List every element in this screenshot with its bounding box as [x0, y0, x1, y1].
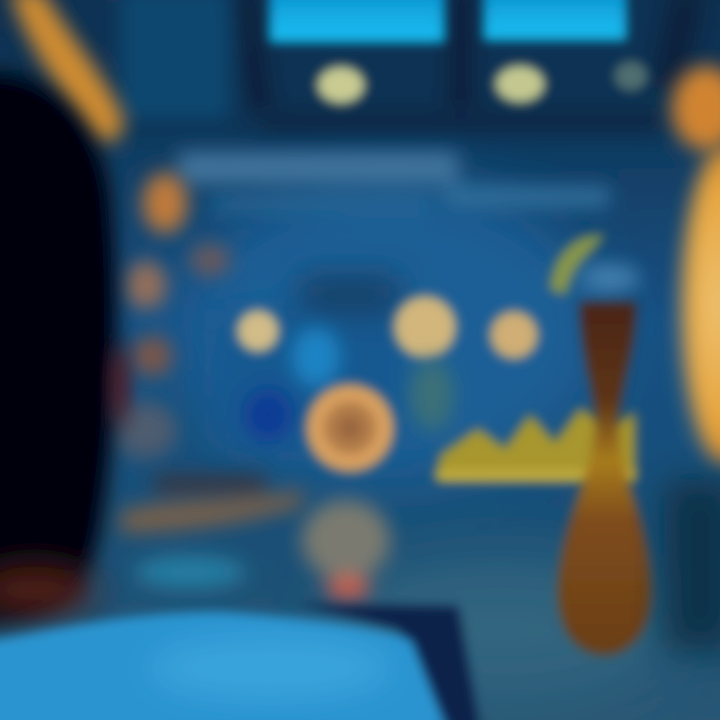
chart circle 1 — [237, 310, 279, 352]
neck red tint — [0, 564, 95, 616]
right dark edge — [665, 480, 720, 650]
light blue patch — [580, 264, 640, 292]
blue bubble — [292, 327, 340, 387]
skylight right — [484, 0, 626, 40]
left column dots — [113, 173, 230, 458]
chart circle 3 — [490, 311, 538, 359]
chart circle 2 — [394, 296, 456, 358]
teal column under circle — [410, 359, 454, 431]
skylight left — [270, 0, 444, 42]
screen heading bands — [178, 152, 610, 212]
ceiling — [0, 0, 720, 134]
top left orange streak — [10, 0, 124, 142]
foreground shoulder — [0, 612, 448, 720]
donut chart — [306, 384, 394, 472]
hourglass vase — [558, 302, 652, 655]
yellow-green swoosh — [550, 235, 605, 295]
dark blue block — [244, 389, 292, 441]
right yellow lamp — [682, 145, 720, 465]
hand reaching to screen — [120, 475, 305, 588]
donut reflection — [302, 500, 390, 600]
ceiling light dim — [614, 61, 648, 91]
red edge glow — [111, 345, 129, 425]
foreground person head — [0, 73, 129, 625]
chart base line — [438, 470, 634, 480]
screen panel lower darker zone — [215, 275, 405, 450]
right orange glow — [672, 66, 720, 150]
ceiling light right — [495, 65, 545, 103]
ceiling light left — [317, 66, 365, 104]
tablet edge — [300, 604, 480, 720]
area chart: yellow peaks — [436, 408, 635, 480]
ceiling beams — [0, 0, 705, 134]
